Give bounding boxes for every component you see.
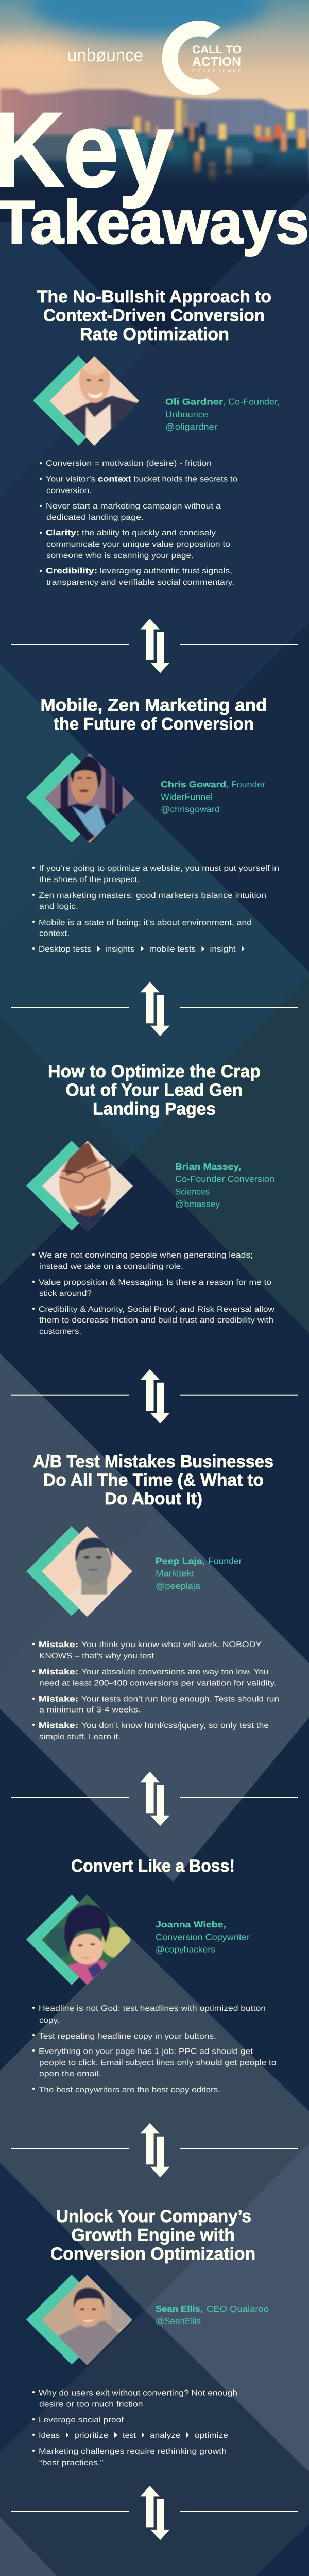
- bullet list: We are not convincing people when generating leads;: [39, 1251, 253, 1260]
- bullet list: Your tests don’t run long enough. Tests should run: [81, 1695, 279, 1703]
- heading: Unlock Your Company’s: [56, 2207, 251, 2226]
- heading: Out of Your Lead Gen: [66, 1080, 243, 1100]
- bullet list: and logic.: [39, 902, 78, 911]
- speaker credit: , Co-Founder,: [223, 397, 280, 407]
- speaker credit: [161, 779, 265, 814]
- heading: Rate Optimization: [80, 325, 229, 344]
- bullet list: analyze: [150, 2431, 180, 2440]
- icon: teal diamond accent: [33, 355, 124, 446]
- bullet list: Mistake:: [39, 1668, 78, 1676]
- bullet list: [32, 864, 279, 954]
- bullet list: [32, 2004, 277, 2094]
- speaker credit: Joanna Wiebe,: [156, 1920, 226, 1929]
- bullet list: the shoes of the prospect.: [39, 875, 140, 884]
- bullet list: context.: [39, 929, 70, 938]
- main title: Key Takeaways: Takeaways: [0, 189, 309, 257]
- bullet list: Ideas: [39, 2431, 60, 2440]
- bullet list: If you’re going to optimize a website, you must put yourself in: [39, 864, 279, 873]
- heading: [50, 2207, 255, 2264]
- logo: Call To Action Conference: CALL TO: [192, 44, 242, 56]
- heading: The No-Bullshit Approach to: [37, 287, 271, 307]
- heading: Mobile, Zen Marketing and: [40, 696, 267, 715]
- logo: Call To Action Conference: CONFERENCE: [192, 69, 241, 73]
- bullet list: customers.: [39, 1327, 81, 1336]
- bullet list: people to click. Email subject lines only should get people to: [39, 2059, 276, 2067]
- bullet list: Clarity:: [46, 529, 79, 537]
- bullet list: context: [98, 475, 131, 483]
- speaker credit: , Founder: [226, 779, 265, 789]
- speaker credit: @SeanEllis: [156, 2316, 201, 2326]
- bullet list: communicate your unique value proposition to: [46, 540, 230, 549]
- logo: Call To Action Conference: [162, 21, 242, 95]
- bullet list: the ability to quickly and concisely: [82, 529, 216, 537]
- panel: talk 4, Peep Laja: [26, 1452, 279, 1741]
- portrait: Oli Gardner: [46, 355, 142, 448]
- speaker credit: @chrisgoward: [161, 805, 220, 814]
- logo: unbounce: unbøunce: [67, 44, 143, 65]
- bullet list: Zen marketing masters: good marketers balance intuition: [39, 891, 266, 900]
- bullet list: You don’t know html/css/jquery, so only test the: [81, 1721, 269, 1730]
- bullet list: someone who is scanning your page.: [46, 551, 194, 560]
- bullet list: Headline is not God: test headlines with optimized button: [39, 2004, 266, 2013]
- heading: Do About It): [105, 1489, 202, 1509]
- bullet list: Everything on your page has 1 job: PPC ad should get: [39, 2047, 253, 2056]
- panel: talk 1, Oli Gardner: [33, 287, 280, 587]
- main title: Key Takeaways: [0, 91, 309, 257]
- bullet list: desire or too much friction: [39, 2400, 143, 2409]
- bullet list: optimize: [195, 2431, 228, 2440]
- portrait: Joanna Wiebe: [41, 1893, 134, 1986]
- heading: How to Optimize the Crap: [48, 1062, 261, 1081]
- bullet list: Mistake:: [39, 1721, 78, 1730]
- heading: Growth Engine with: [71, 2226, 235, 2245]
- speaker credit: Brian Massey,: [175, 1162, 241, 1172]
- portrait: Sean Ellis: [41, 2274, 134, 2366]
- bullet list: Desktop tests: [39, 945, 91, 954]
- bullet list: prioritize: [74, 2431, 108, 2440]
- bullet list: Mistake:: [39, 1695, 78, 1703]
- divider with up/down arrows: [11, 619, 298, 673]
- speaker credit: Co-Founder Conversion: [175, 1174, 274, 1184]
- panel: talk 6, Sean Ellis: [26, 2207, 269, 2467]
- bullet list: Test repeating headline copy in your buttons.: [39, 2032, 216, 2041]
- bullet list: KNOWS – that’s why you test: [39, 1652, 154, 1660]
- speaker credit: [175, 1162, 274, 1209]
- bullet list: bucket holds the secrets to: [134, 475, 237, 483]
- bullet list: conversion.: [46, 486, 92, 495]
- bullet list: insight: [210, 945, 236, 954]
- icon: teal diamond accent: [26, 1526, 117, 1616]
- bullet list: Marketing challenges require rethinking growth: [39, 2447, 227, 2456]
- speaker credit: Conversion Copywriter: [156, 1932, 250, 1942]
- speaker credit: [165, 397, 280, 432]
- bullet list: stick around?: [39, 1289, 92, 1298]
- heading: A/B Test Mistakes Businesses: [33, 1452, 273, 1471]
- divider with up/down arrows: [11, 1772, 298, 1826]
- portrait: Peep Laja: [41, 1525, 134, 1618]
- bullet list: a minimum of 3-4 weeks.: [39, 1705, 140, 1715]
- bullet list: “best practices.”: [39, 2459, 103, 2467]
- heading: Do All The Time (& What to: [43, 1470, 264, 1490]
- speaker credit: Founder: [208, 1556, 242, 1566]
- divider with up/down arrows: [11, 982, 298, 1036]
- speaker credit: Sciences: [175, 1187, 210, 1196]
- bullet list: Conversion = motivation (desire) - friction: [46, 459, 212, 468]
- bullet list: [40, 459, 237, 587]
- bullet list: Why do users exit without converting? Not enough: [39, 2388, 237, 2398]
- speaker credit: @copyhackers: [156, 1944, 215, 1955]
- bullet list: Leverage social proof: [39, 2416, 124, 2425]
- heading: [33, 1452, 273, 1509]
- bullet list: Your visitor’s: [46, 475, 95, 483]
- heading: the Future of Conversion: [54, 714, 254, 734]
- divider with up/down arrows: [11, 2486, 298, 2540]
- bullet list: leveraging authentic trust signals,: [100, 567, 232, 575]
- bullet list: [32, 1251, 275, 1336]
- speaker credit: Peep Laja,: [156, 1556, 205, 1566]
- icon: teal diamond accent: [26, 2275, 117, 2365]
- panel: talk 5, Joanna Wiebe: [26, 1856, 276, 2094]
- heading: Context-Driven Conversion: [43, 306, 265, 326]
- speaker credit: Markitekt: [156, 1568, 194, 1579]
- bullet list: [32, 2388, 237, 2467]
- speaker credit: Sean Ellis,: [156, 2304, 203, 2314]
- icon: teal diamond accent: [26, 1141, 117, 1230]
- bullet list: Credibility & Authority, Social Proof, and Risk Reversal allow: [39, 1305, 275, 1314]
- bullet list: test: [123, 2431, 136, 2440]
- speaker credit: CEO Qualaroo: [207, 2304, 269, 2314]
- bullet list: Your absolute conversions are way too low. You: [81, 1668, 269, 1676]
- bullet list: simple stuff. Learn it.: [39, 1733, 121, 1741]
- bullet list: Never start a marketing campaign without a: [46, 502, 221, 511]
- speaker credit: [156, 1556, 242, 1591]
- divider with up/down arrows: [11, 2123, 298, 2177]
- portrait: Chris Goward: [44, 752, 136, 846]
- bullet list: Mistake:: [39, 1640, 78, 1649]
- bullet list: copy.: [39, 2016, 60, 2025]
- speaker credit: Oli Gardner: [165, 397, 223, 407]
- bullet list: You think you know what will work. NOBODY: [81, 1640, 262, 1649]
- bullet list: instead we take on a consulting role.: [39, 1262, 183, 1271]
- heading: [37, 287, 271, 344]
- bullet list: need at least 200-400 conversions per variation for validity.: [39, 1679, 277, 1688]
- icon: teal diamond accent: [26, 752, 117, 843]
- heading: Conversion Optimization: [50, 2244, 255, 2264]
- heading: [48, 1062, 261, 1119]
- speaker credit: [156, 1920, 250, 1955]
- speaker credit: Chris Goward: [161, 779, 226, 789]
- panel: talk 3, Brian Massey: [26, 1062, 275, 1336]
- bullet list: [32, 1640, 279, 1741]
- speaker credit: @peeplaja: [156, 1581, 201, 1591]
- header photo: blurred city skyline at sunset: [0, 0, 309, 193]
- bullet list: Value proposition & Messaging: Is there a reason for me to: [39, 1278, 271, 1287]
- bullet list: mobile tests: [149, 945, 196, 954]
- icon: teal diamond accent: [26, 1895, 117, 1985]
- speaker credit: Unbounce: [165, 410, 208, 419]
- heading: Convert Like a Boss!: [71, 1856, 235, 1876]
- heading: [40, 696, 267, 734]
- portrait: Brian Massey: [41, 1140, 134, 1232]
- speaker credit: WiderFunnel: [161, 792, 213, 802]
- speaker credit: [156, 2304, 269, 2326]
- bullet list: Mobile is a state of being; it’s about environment, and: [39, 918, 252, 927]
- panel: talk 2, Chris Goward: [26, 696, 279, 954]
- speaker credit: @oligardner: [165, 422, 217, 432]
- logo: Call To Action Conference: ACTION: [192, 55, 241, 69]
- bullet list: them to decrease friction and build trust and credibility with: [39, 1316, 273, 1325]
- bullet list: dedicated landing page.: [46, 513, 144, 522]
- divider with up/down arrows: [11, 1369, 298, 1423]
- bullet list: insights: [105, 945, 134, 954]
- bullet list: Credibility:: [46, 567, 97, 575]
- bullet list: open the email.: [39, 2070, 101, 2078]
- bullet list: transparency and verifiable social commentary.: [46, 578, 234, 587]
- heading: Landing Pages: [93, 1099, 216, 1119]
- bullet list: The best copywriters are the best copy editors.: [39, 2086, 220, 2094]
- speaker credit: @bmassey: [175, 1199, 220, 1209]
